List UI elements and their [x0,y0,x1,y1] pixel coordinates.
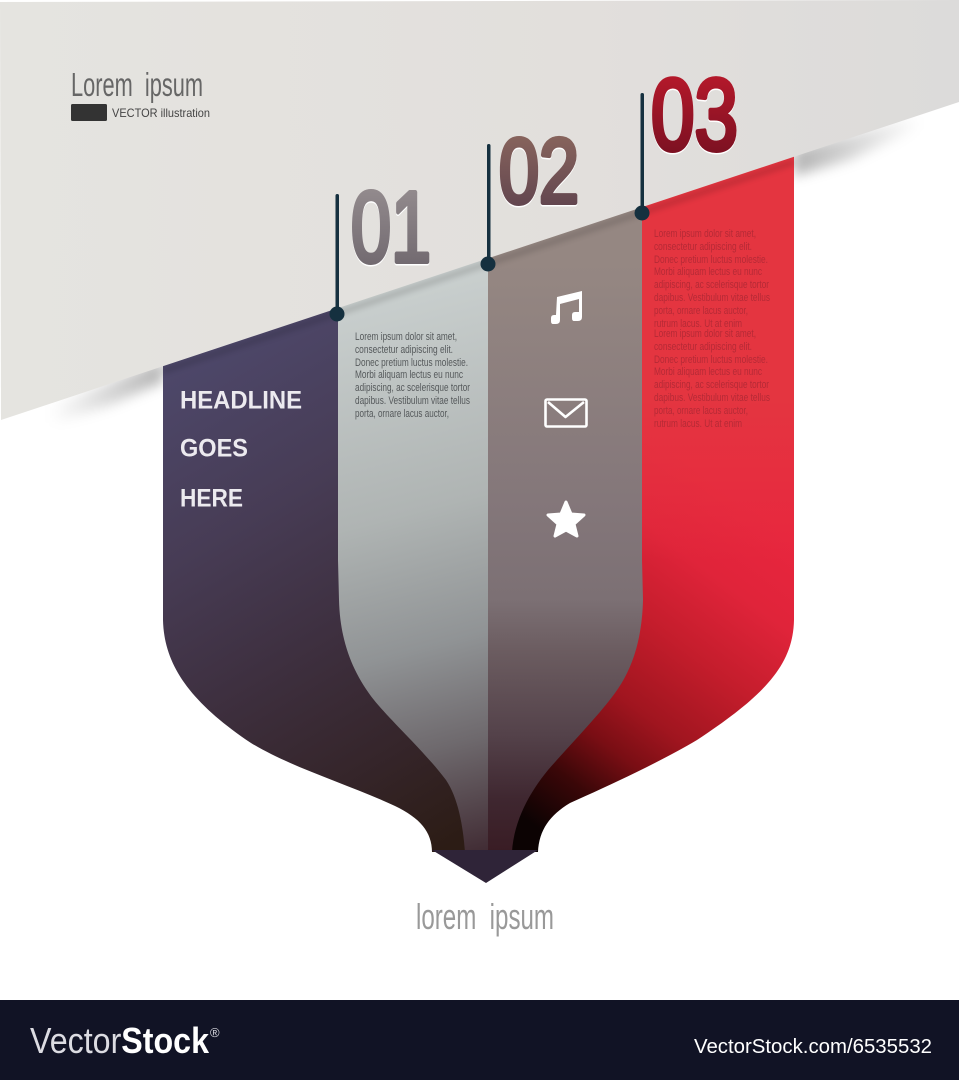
body text: column 1: Donec pretium luctus molestie. [355,357,468,369]
panel: top fold [0,0,959,420]
body text: column 2: Donec pretium luctus molestie. [654,354,768,366]
body text: column 2: consectetur adipiscing elit. [654,341,752,353]
number 01 with pin: 01 [351,173,431,285]
body text: column 2: consectetur adipiscing elit. [654,241,752,253]
fold shadow: left [40,360,163,425]
number 02 with pin: 02 [499,120,579,222]
body text: column 2: adipiscing, ac scelerisque tortor [654,379,769,391]
body text: column 1: dapibus. Vestibulum vitae tellus [355,395,470,407]
label chip [71,104,107,121]
fold shadow on ribbons [163,159,794,374]
subtitle: VECTOR illustration [112,106,210,120]
registered mark: ® [210,1025,220,1040]
number 03 with pin: 03 [651,60,738,172]
panel: brown icon ribbon [488,200,643,852]
icon: music note [551,291,582,324]
footer logo: VectorStock [30,1020,210,1061]
panel: dark headline ribbon [163,250,488,852]
icon: star [548,502,584,536]
title: Lorem ipsum [71,66,203,103]
body text: column 2: porta, ornare lacus auctor, [654,405,748,417]
body text: column 1: Morbi aliquam lectus eu nunc [355,369,463,381]
body text: column 1: Lorem ipsum dolor sit amet, [355,331,457,343]
headline text: HERE [180,484,243,512]
headline text: HEADLINE [180,386,302,414]
headline text [180,386,302,512]
body text: column 1: consectetur adipiscing elit. [355,344,453,356]
ribbon tip [432,850,538,883]
number 02 with pin: 02 [499,122,579,224]
caption: lorem ipsum [416,896,554,937]
body text: column 2: Donec pretium luctus molestie. [654,254,768,266]
body text: column 2: rutrum lacus. Ut at enim [654,318,742,330]
body text: column 2: Lorem ipsum dolor sit amet, [654,228,756,240]
body text: column 2: porta, ornare lacus auctor, [654,305,748,317]
panel: gray text ribbon [338,255,488,852]
body text: column 1: porta, ornare lacus auctor, [355,408,449,420]
number 03 with pin [634,60,738,220]
body text: column 2: Morbi aliquam lectus eu nunc [654,366,762,378]
footer bar [0,1000,959,1080]
number 03 with pin: 03 [651,61,738,173]
body text: column 2: adipiscing, ac scelerisque tortor [654,279,769,291]
title [71,66,210,121]
footer url: VectorStock.com/6535532 [694,1036,932,1058]
body text: column 2: dapibus. Vestibulum vitae tellus [654,392,770,404]
panel: red text ribbon [500,150,794,852]
number 01 with pin [330,172,431,322]
body text: column 2: dapibus. Vestibulum vitae tellus [654,292,770,304]
headline text: GOES [180,434,248,462]
number 01 with pin: 01 [351,172,431,284]
body text: column 1: adipiscing, ac scelerisque tortor [355,382,470,394]
body text: column 2: Lorem ipsum dolor sit amet, [654,328,756,340]
number 02 with pin [480,120,579,272]
body text: column 2: Morbi aliquam lectus eu nunc [654,266,762,278]
fold shadow: right [794,115,920,176]
body text: column 1 [355,331,470,420]
body text: column 2 [654,228,770,430]
icon: envelope [546,400,586,426]
body text: column 2: rutrum lacus. Ut at enim [654,418,742,430]
